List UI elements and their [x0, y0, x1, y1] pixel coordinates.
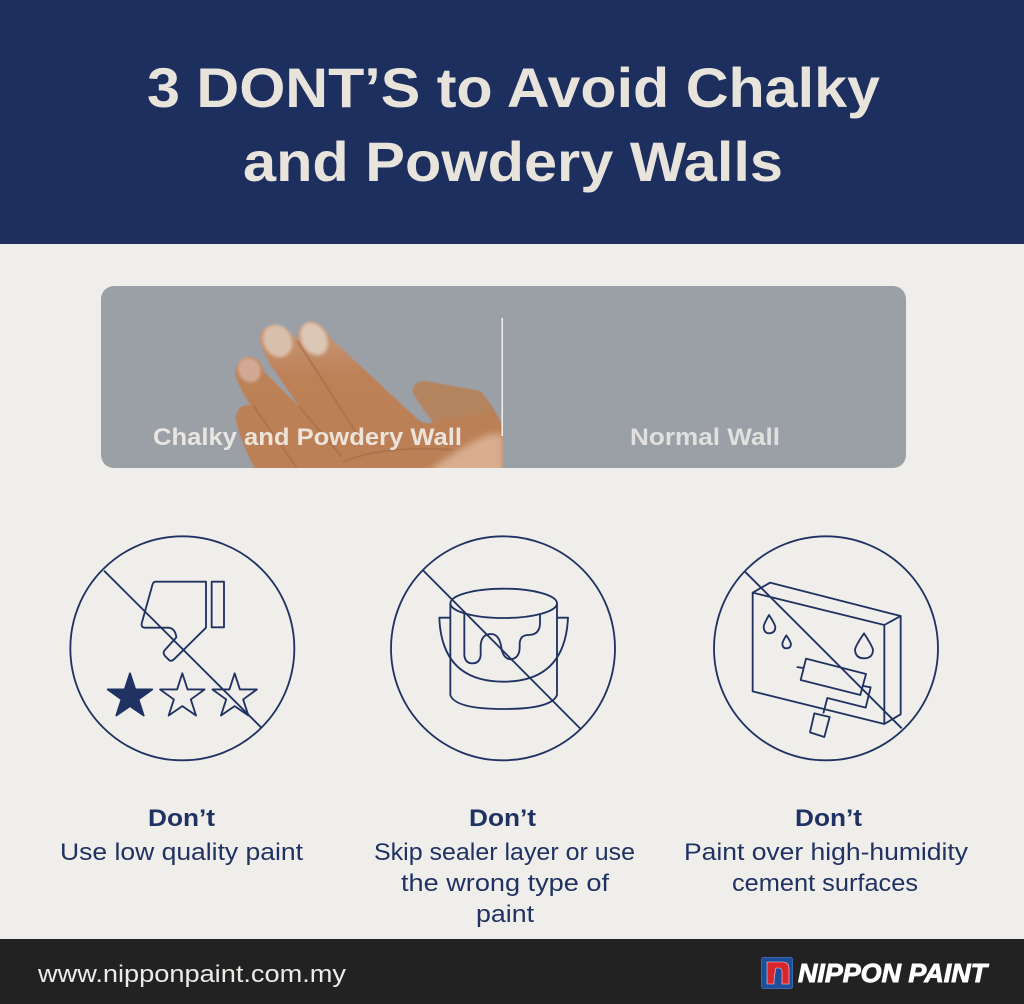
caption: high-humidity surfaces: Don’t	[795, 805, 862, 832]
caption: sealer layer: Skip sealer layer or use	[374, 839, 635, 866]
label: normal wall: Normal Wall	[630, 424, 780, 451]
caption: high-humidity surfaces: Paint over high-humidity	[684, 839, 968, 866]
caption: low quality paint: Use low quality paint	[60, 839, 303, 866]
caption: low quality paint: Don’t	[148, 805, 215, 832]
title: 3 DONT’S to Avoid Chalky	[147, 56, 880, 119]
footer bar	[0, 939, 1024, 1004]
panel: chalky vs normal wall comparison	[101, 286, 906, 475]
icon: low quality paint	[70, 536, 294, 760]
website url: www.nipponpaint.com.my	[37, 961, 346, 988]
caption: sealer layer: the wrong type of	[401, 870, 609, 897]
header banner	[0, 0, 1024, 244]
title: and Powdery Walls	[243, 130, 783, 193]
caption: high-humidity surfaces	[684, 805, 968, 897]
caption: low quality paint	[60, 805, 303, 866]
divider line	[502, 318, 503, 436]
caption: sealer layer: paint	[476, 901, 534, 928]
label: chalky and powdery wall: Chalky and Powdery Wall	[153, 424, 462, 451]
title	[147, 56, 880, 193]
icon: humid cement wall with roller	[714, 536, 938, 760]
icon: paint can	[391, 536, 615, 760]
caption: high-humidity surfaces: cement surfaces	[732, 870, 918, 897]
logo: nippon paint: NIPPON PAINT	[798, 958, 989, 988]
caption: sealer layer: Don’t	[469, 805, 536, 832]
caption: sealer layer	[374, 805, 635, 928]
photo: hand with chalky fingertips	[234, 318, 503, 475]
